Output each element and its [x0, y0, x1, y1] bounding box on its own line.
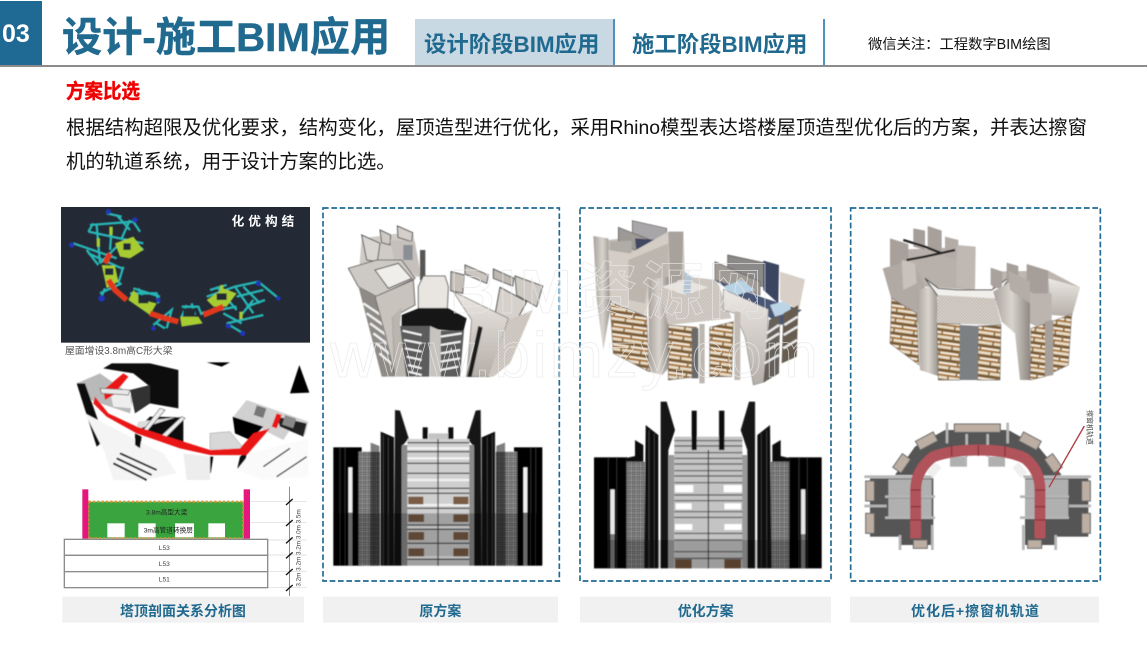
section elevation drawing: L51 — [159, 577, 170, 584]
title: 设计-施工BIM应用 — [62, 15, 390, 60]
active tab: design stage: 设计阶段BIM应用 — [424, 31, 599, 57]
track leader line and label — [1049, 410, 1094, 487]
description text: 机的轨道系统，用于设计方案的比选。 — [66, 151, 396, 173]
subheading: 方案比选 — [66, 79, 140, 103]
track leader line and label: 擦窗机轨道 — [1085, 410, 1094, 445]
section elevation drawing: 3m高管道转换层 — [144, 525, 193, 534]
dashed frame — [580, 208, 831, 581]
original scheme elevation — [333, 410, 542, 566]
section number badge: 03 — [2, 20, 30, 48]
watermark: BIM资源网 — [450, 258, 774, 327]
panel: optimised scheme — [580, 208, 831, 623]
beam caption: 屋面增设3.8m高C形大梁 — [65, 344, 173, 357]
description text: 根据结构超限及优化要求，结构变化，屋顶造型进行优化，采用Rhino模型表达塔楼屋顶造型优化后的方案，并表达擦窗 — [66, 117, 1087, 139]
optimised scheme elevation — [594, 402, 822, 568]
red C-shaped beam render — [77, 362, 309, 480]
track plan view — [864, 410, 1094, 550]
caption: optimised plus track: 优化后+擦窗机轨道 — [911, 603, 1039, 619]
section elevation drawing: 3.2m 3.2m 3.2m 3.0m 3.5m — [296, 509, 303, 587]
panel: original scheme — [323, 208, 559, 623]
dashed frame — [851, 208, 1100, 581]
section elevation drawing: L53 — [159, 545, 170, 552]
section number badge — [0, 1, 42, 66]
optimised scheme 3D render — [593, 221, 805, 385]
tab: construction stage: 施工阶段BIM应用 — [632, 31, 807, 57]
caption: section analysis: 塔顶剖面关系分析图 — [120, 603, 246, 619]
badge text: 化优构结 — [232, 213, 298, 228]
dashed frame — [323, 208, 559, 581]
panel: tower top section analysis — [61, 207, 310, 623]
section elevation drawing — [64, 487, 307, 596]
structural optimisation model — [61, 207, 310, 343]
original scheme 3D render — [348, 226, 543, 377]
caption: original scheme — [323, 597, 558, 623]
caption: optimised plus track — [850, 597, 1099, 623]
description text — [66, 117, 1087, 173]
section elevation drawing: 3.8m高型大梁 — [146, 507, 188, 516]
caption: original scheme: 原方案 — [419, 603, 461, 619]
watermark: www.bimzy.com — [329, 319, 820, 391]
track scheme 3D render — [883, 226, 1080, 380]
panel: optimised scheme with window-cleaning track — [850, 208, 1100, 623]
wechat note: 微信关注：工程数字BIM绘图 — [868, 36, 1051, 53]
caption: optimised scheme — [580, 597, 831, 623]
active tab: design stage — [415, 19, 614, 66]
caption: section analysis — [62, 597, 304, 623]
watermark — [329, 258, 820, 391]
caption: optimised scheme: 优化方案 — [678, 603, 734, 619]
section elevation drawing: L53 — [159, 561, 170, 568]
header bar — [0, 1, 1147, 67]
